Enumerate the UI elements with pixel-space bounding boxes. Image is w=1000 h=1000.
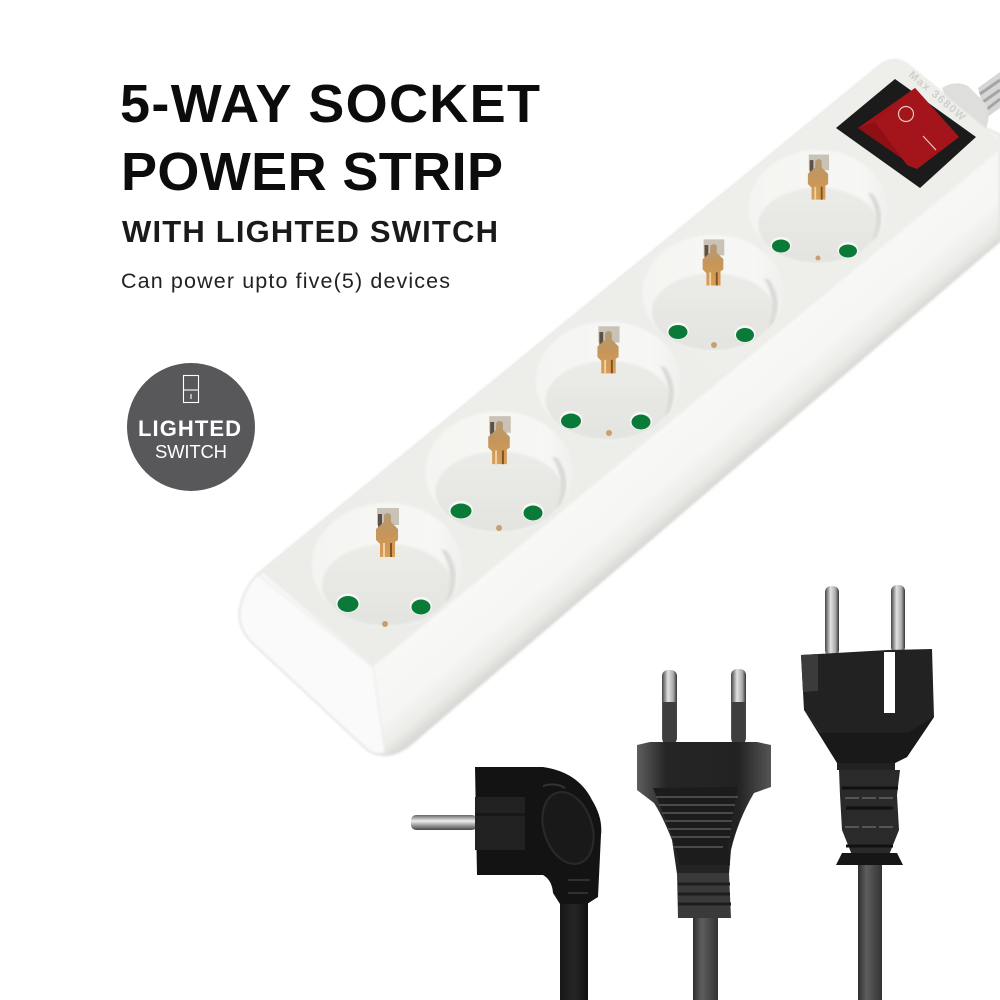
power strip	[240, 60, 1000, 755]
plug: angled schuko	[411, 767, 602, 1000]
strain relief	[839, 770, 900, 855]
plug: europlug	[637, 669, 771, 1000]
badge: lighted switch	[127, 363, 255, 491]
embossed rating text: Max 3680W	[906, 69, 968, 124]
cord and end cap	[942, 72, 1000, 132]
plug: straight schuko	[801, 585, 934, 1000]
end face	[240, 575, 385, 754]
title	[120, 74, 540, 202]
socket 4	[642, 235, 784, 351]
body	[475, 767, 601, 904]
pins	[825, 586, 839, 656]
strain relief	[677, 873, 731, 918]
icon: wall switch	[184, 376, 198, 402]
socket 1	[312, 503, 462, 627]
title: 5-WAY SOCKET	[120, 74, 540, 134]
title: POWER STRIP	[121, 142, 503, 202]
socket 2	[426, 411, 572, 533]
strip body	[240, 60, 1000, 755]
pin	[411, 815, 477, 830]
badge: lighted switch: SWITCH	[155, 441, 227, 462]
pins	[662, 670, 677, 744]
cable	[858, 860, 882, 1000]
head	[801, 649, 934, 770]
description text: Can power upto five(5) devices	[121, 269, 450, 293]
earth slot	[884, 652, 895, 713]
cable	[693, 915, 718, 1000]
badge: lighted switch: LIGHTED	[138, 416, 241, 441]
socket 5	[749, 150, 887, 264]
cable	[560, 900, 588, 1000]
top face	[262, 60, 1000, 667]
socket 3	[536, 321, 680, 441]
head	[637, 742, 771, 874]
subtitle: WITH LIGHTED SWITCH	[122, 214, 498, 249]
switch	[836, 79, 976, 188]
grip ribs	[656, 797, 738, 847]
